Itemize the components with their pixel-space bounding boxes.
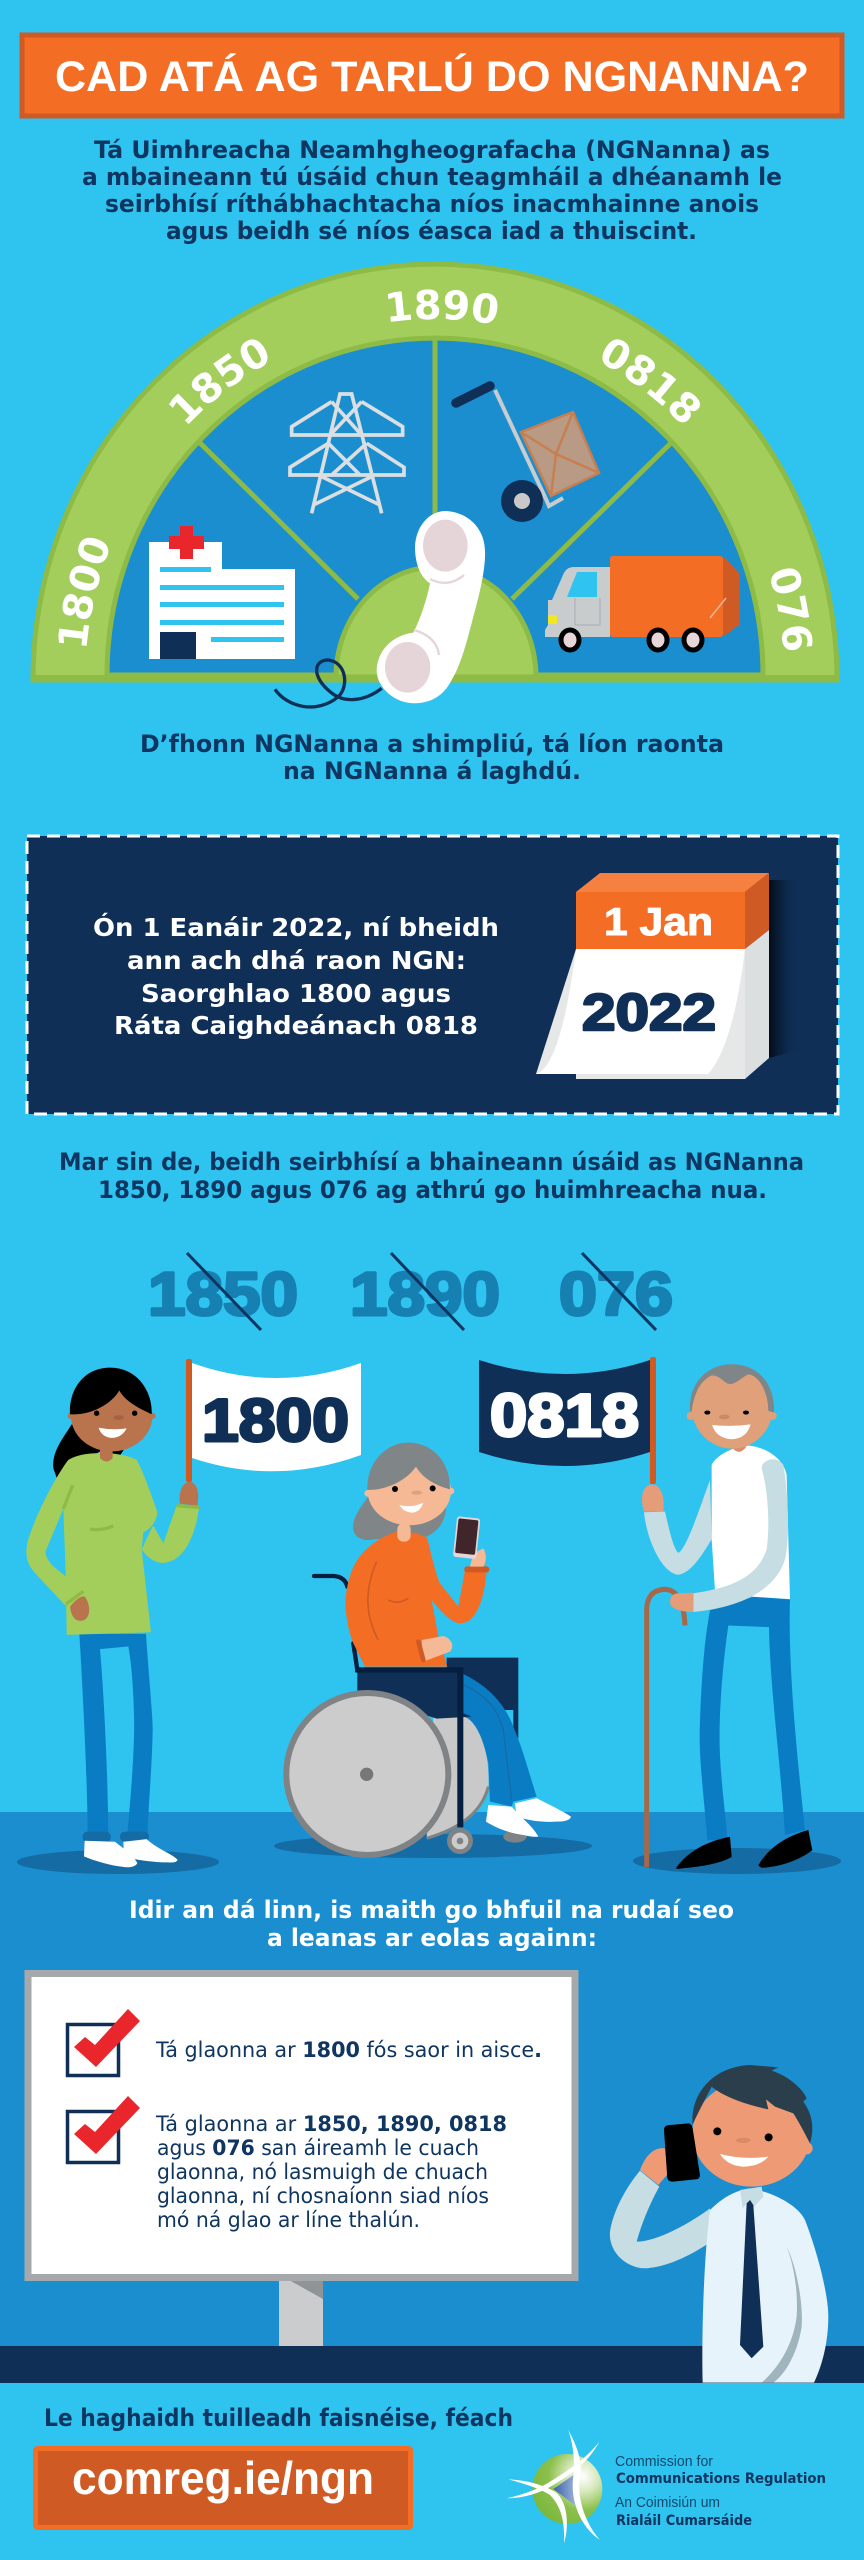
wheelchair back [447,1658,518,1738]
hand [640,2148,668,2185]
head [689,2129,698,2138]
title banner [22,35,842,116]
sleeves [644,1480,712,1575]
head [687,1412,695,1420]
white shirt [712,1446,790,1599]
phone [453,1516,480,1559]
icon: calendar: 1 Jan [604,901,713,944]
intro text [82,136,782,245]
phone [664,2123,700,2182]
icon: truck [545,556,740,650]
legs [462,1673,537,1807]
intro text: seirbhísí ríthábhachtacha níos inacmhainne anois [105,190,759,218]
logo text: An Coimisiún um [615,2494,720,2511]
logo text: Commission for [615,2453,713,2470]
notice text: Ón 1 Eanáir 2022, ní bheidh [93,912,499,942]
text: simplification: na NGNanna á laghdú. [283,757,581,785]
icon: telephone handset [377,511,485,703]
collar [740,2187,763,2208]
check item 2: glaonna, ní chosnaíonn siad níos [157,2184,489,2208]
intro text: Tá Uimhreacha Neamhgheografacha (NGNanna) as [94,136,770,164]
gauge hub [336,567,536,677]
flag: 0818: 0818 [490,1382,639,1449]
logo text: Communications Regulation [616,2471,826,2487]
wheelchair frame [457,1667,463,1827]
check item 2: Tá glaonna ar 1850, 1890, 0818 [155,2112,507,2136]
check item 1 [68,2009,542,2076]
title banner: CAD ATÁ AG TARLÚ DO NGNANNA? [55,52,809,101]
flag: 0818 [479,1357,656,1484]
panel: signboard checklist [28,1974,575,2346]
icon: hand trolley and parcel [456,386,599,522]
check item 1: Tá glaonna ar 1800 fós saor in aisce. [155,2038,542,2062]
notice text: ann ach dhá raon NGN: [127,946,466,975]
jeans [79,1634,153,1833]
icon: calendar: 2022 [582,984,716,1042]
shoes [676,1837,732,1869]
person: man on phone [610,2065,828,2383]
trousers [700,1597,805,1840]
crossed-out numbers: 1850 [148,1260,298,1328]
gauge numbers: 076 [771,568,812,650]
wheelchair far wheel [427,1717,489,1838]
logo text: Rialáil Cumarsáide [616,2513,752,2529]
person: man with 0818 flag and cane [642,1364,812,1869]
text: services changing: Mar sin de, beidh seirbhísí a bhaineann úsáid as NGNanna [59,1148,804,1176]
check item 2: glaonna, nó lasmuigh de chuach [157,2160,488,2184]
crossed-out numbers: 076 [559,1260,673,1328]
icon: hospital [149,526,295,659]
panel: 1 January 2022 notice [27,836,838,1114]
gauge numbers: 0818 [602,339,700,422]
text: simplification [140,730,724,785]
person: woman with 1800 flag [26,1368,199,1867]
hands [642,1485,664,1512]
cane [647,1589,685,1867]
gauge numbers: 1890 [388,289,498,324]
grey hair back [353,1497,447,1540]
notice text [93,912,499,1040]
tie [740,2200,763,2358]
flag: 1800: 1800 [202,1387,349,1454]
gauge base band [33,675,837,682]
shoes [515,1798,571,1822]
crossed-out numbers [148,1253,673,1330]
check item 2: mó ná glao ar líne thalún. [157,2208,420,2232]
shoes [123,1839,178,1863]
gauge numbers: 1850 [169,339,268,424]
check item 2: agus 076 san áireamh le cuach [157,2136,479,2160]
footer text: Le haghaidh tuilleadh faisnéise, féach [44,2404,513,2432]
text: meanwhile: Idir an dá linn, is maith go bhfuil na rudaí seo [129,1896,734,1924]
text: meanwhile [129,1896,734,1952]
main wheel [286,1693,448,1855]
logo [506,2430,826,2543]
gauge dial [30,262,840,709]
text: meanwhile: a leanas ar eolas againn: [267,1924,597,1952]
wheelchair seat [357,1671,472,1719]
crossed-out numbers: 1890 [350,1260,500,1328]
text: simplification: D’fhonn NGNanna a shimpliú, tá líon raonta [140,730,724,758]
person: woman in wheelchair [286,1443,571,1855]
gauge numbers: 1800 [58,538,108,646]
logo text [615,2453,826,2529]
orange top [346,1532,487,1667]
notice text: Ráta Caighdeánach 0818 [114,1011,478,1040]
icon: telephone cord [275,660,382,707]
hands [180,1482,198,1505]
head [68,1413,74,1419]
lower hand [422,1636,452,1662]
green top [63,1453,157,1635]
flag: 1800 [186,1359,361,1482]
gauge arc [33,264,837,680]
button: comreg.ie/ngn: comreg.ie/ngn [72,2452,374,2504]
icon: calendar [536,873,800,1079]
logo mark [506,2430,602,2543]
text: services changing [59,1148,804,1204]
arm [610,2171,713,2268]
gauge dividers [198,338,673,599]
text: services changing: 1850, 1890 agus 076 ag athrú go huimhreacha nua. [98,1176,767,1204]
shirt [702,2188,828,2383]
button: comreg.ie/ngn [36,2448,410,2528]
intro text: agus beidh sé níos éasca iad a thuiscint. [166,217,697,245]
icon: pylon [290,394,404,513]
head [397,1523,411,1542]
intro text: a mbaineann tú úsáid chun teagmháil a dhéanamh le [82,163,782,191]
gauge inner panel [107,338,763,675]
check item 2 [68,2096,507,2232]
gauge numbers [58,289,812,650]
notice text: Saorghlao 1800 agus [141,979,451,1008]
ground shadows [17,1834,841,1874]
